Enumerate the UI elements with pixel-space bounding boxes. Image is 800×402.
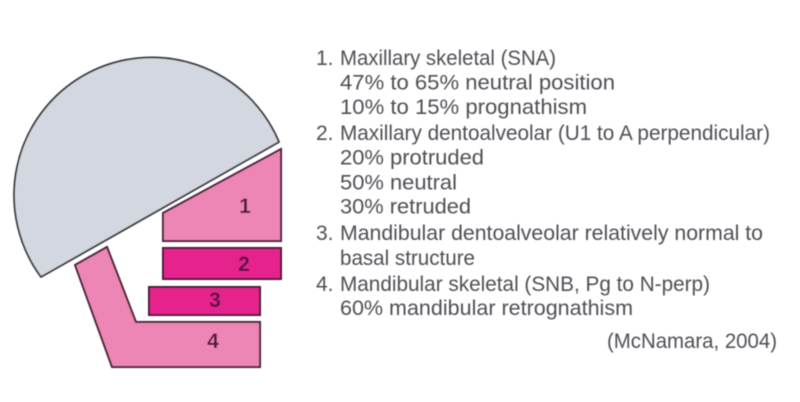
component 3: mandibular dentoalveolar: 3 bbox=[209, 289, 221, 312]
item 4: mandibular skeletal: Mandibular skeletal (SNB, Pg to N-perp) bbox=[340, 273, 710, 296]
citation: (McNamara, 2004) bbox=[607, 330, 777, 353]
item 4: mandibular skeletal: 60% mandibular retrognathism bbox=[340, 297, 633, 320]
component 3: mandibular dentoalveolar bbox=[149, 287, 260, 315]
cranium semicircle bbox=[14, 57, 279, 277]
component 4: mandibular skeletal bbox=[75, 247, 260, 367]
component 2: maxillary dentoalveolar bbox=[163, 248, 281, 279]
component 1: maxillary skeletal: 1 bbox=[239, 195, 251, 218]
item 3: mandibular dentoalveolar: basal structure bbox=[340, 247, 475, 270]
component 1: maxillary skeletal bbox=[163, 149, 281, 241]
item 1: maxillary skeletal: 47% to 65% neutral position bbox=[340, 72, 615, 94]
component 4: mandibular skeletal: 4 bbox=[207, 330, 219, 353]
item 2: maxillary dentoalveolar: 2. bbox=[316, 122, 334, 145]
item 3: mandibular dentoalveolar: Mandibular dentoalveolar relatively normal to bbox=[340, 222, 763, 245]
item 1: maxillary skeletal: 1. bbox=[316, 47, 334, 70]
item 3: mandibular dentoalveolar bbox=[316, 222, 763, 270]
item 2: maxillary dentoalveolar bbox=[316, 122, 770, 218]
item 2: maxillary dentoalveolar: 50% neutral bbox=[340, 172, 457, 194]
text list: McNamara findings bbox=[316, 47, 777, 353]
item 1: maxillary skeletal: Maxillary skeletal (SNA) bbox=[340, 47, 556, 70]
item 1: maxillary skeletal: 10% to 15% prognathism bbox=[340, 96, 587, 119]
item 2: maxillary dentoalveolar: 20% protruded bbox=[340, 146, 484, 170]
component 2: maxillary dentoalveolar: 2 bbox=[238, 253, 250, 276]
item 2: maxillary dentoalveolar: 30% retruded bbox=[340, 196, 471, 218]
diagram: facial skeletal components bbox=[14, 57, 281, 367]
item 1: maxillary skeletal bbox=[316, 47, 615, 119]
item 3: mandibular dentoalveolar: 3. bbox=[316, 222, 334, 245]
item 4: mandibular skeletal: 4. bbox=[316, 273, 334, 296]
item 2: maxillary dentoalveolar: Maxillary dentoalveolar (U1 to A perpendicular) bbox=[340, 122, 770, 145]
item 4: mandibular skeletal bbox=[316, 273, 710, 320]
